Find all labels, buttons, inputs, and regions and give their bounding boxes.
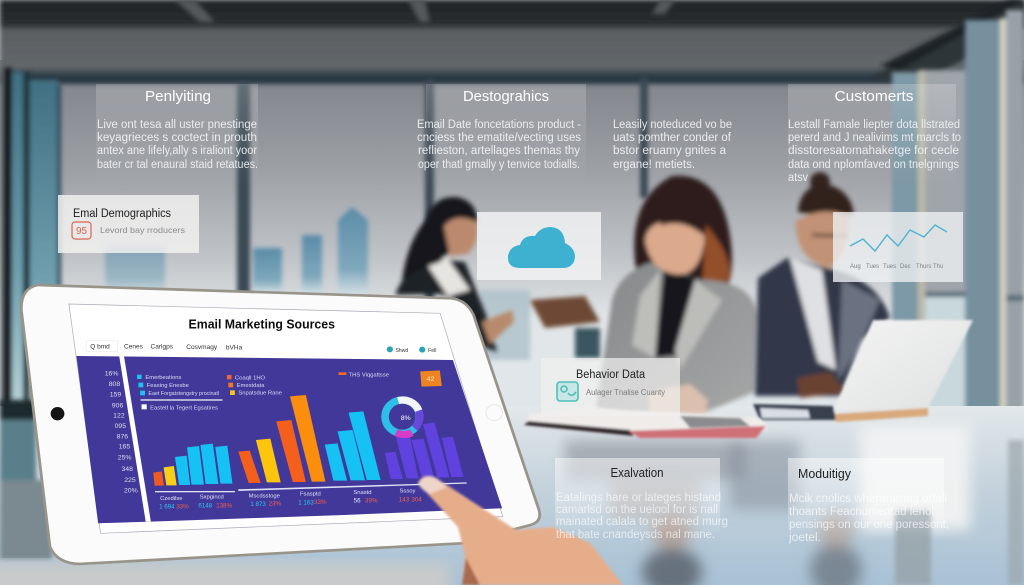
axis labels: Thurs xyxy=(916,264,931,270)
body text xyxy=(556,492,728,541)
tablet xyxy=(21,285,540,564)
chart axis and figures: 33% xyxy=(314,499,327,506)
y axis labels: 16% xyxy=(105,370,118,377)
body text: reflieston, artellages themas thy xyxy=(418,145,580,157)
body text: that bate cnandeysds nal mane. xyxy=(556,529,715,541)
body text: joetel. xyxy=(788,532,821,544)
tab bar: Cosvmagy xyxy=(186,344,218,351)
notebook xyxy=(524,408,768,438)
legend: Eastetl la Tegert Egsatires xyxy=(150,405,218,411)
y axis labels: 165 xyxy=(119,444,130,451)
chart axis and figures: 143 xyxy=(399,497,410,504)
donut chart xyxy=(385,400,420,435)
text block: centre column: Leasily noteduced vo be xyxy=(613,119,732,131)
screen title: Email Marketing Sources xyxy=(189,317,335,331)
body text xyxy=(417,119,581,171)
y axis labels: 25% xyxy=(118,455,132,462)
card: Behavior Data xyxy=(541,358,680,416)
tab bar: Q bmd xyxy=(90,344,110,351)
heading: Exalvation xyxy=(610,466,664,480)
chart axis and figures: 33% xyxy=(176,504,189,511)
tab bar: Cenes xyxy=(124,343,143,350)
panel: Exalvation xyxy=(555,458,728,541)
body text: Live ont tesa all uster pnestinge xyxy=(97,119,257,131)
y axis labels: 906 xyxy=(112,402,124,409)
y axis labels: 808 xyxy=(109,381,120,388)
card heading: Emal Demographics xyxy=(73,208,171,220)
tab bar: Shwd xyxy=(395,348,408,354)
y axis labels: 122 xyxy=(113,413,125,420)
tablet body xyxy=(21,285,540,564)
chart axis and figures: 23% xyxy=(269,500,282,507)
y axis labels: 20% xyxy=(124,488,138,495)
heading: Destograhics xyxy=(463,88,549,105)
icon: red document: 95 xyxy=(76,226,87,237)
text block: centre column: uats pomther conder of xyxy=(613,132,732,144)
body text xyxy=(788,119,961,184)
card: Email Demographics xyxy=(58,195,199,253)
body text xyxy=(788,493,949,544)
chart axis and figures: 39% xyxy=(365,497,378,504)
panel: Penlyiting xyxy=(96,84,258,184)
panel: Destograhics xyxy=(417,84,586,184)
y axis labels xyxy=(105,370,138,495)
text block: centre column: bstor eruamy gnites a xyxy=(613,145,727,157)
body text: data ond nplomfaved on tnelgnings xyxy=(788,159,959,171)
screen xyxy=(69,304,503,533)
heading: Penlyiting xyxy=(145,88,211,105)
legend: Coaqll 1HO xyxy=(235,375,266,381)
chart axis and figures xyxy=(155,482,467,511)
chart axis and figures: Mscdsstoge xyxy=(249,493,280,499)
chart axis and figures: 304 xyxy=(412,496,423,503)
body text: keyagrieces s coctect in prouth xyxy=(97,132,257,144)
icon: cloud xyxy=(508,227,575,268)
chart axis and figures: Fsasptd xyxy=(300,492,321,498)
heading: Moduitigy xyxy=(798,467,852,481)
axis labels: Tues xyxy=(883,264,896,270)
legend: Snpatsdue Rane xyxy=(238,391,282,397)
chart axis and figures: 1 694 xyxy=(159,504,175,511)
panel: Moduitigy xyxy=(788,458,949,544)
body text: pererd and J nealivims mt marcls to xyxy=(788,132,961,144)
axis labels: Thu xyxy=(933,264,943,270)
body text: mainated calala to get atned murg xyxy=(556,516,728,528)
chart axis and figures: 56 xyxy=(354,498,361,505)
card subtext: Levord bay rroducers xyxy=(100,225,185,235)
card heading: Behavior Data xyxy=(576,369,646,381)
chart axis and figures: 1 163 xyxy=(298,500,314,507)
tab bar: Carlgps xyxy=(151,344,173,351)
chart axis and figures: Sssoy xyxy=(400,489,416,495)
tablet home ring xyxy=(486,405,502,421)
heading: Customerts xyxy=(834,88,914,105)
chart axis and figures: 1 873 xyxy=(250,501,266,508)
tablet camera xyxy=(51,407,64,420)
legend: Eaet Forgatstengstry procinatl xyxy=(148,391,219,397)
panel: Customerts xyxy=(788,84,961,184)
tab bar xyxy=(86,341,436,354)
y axis labels: 159 xyxy=(110,391,121,398)
person: woman at left xyxy=(395,197,600,358)
legend: THS Viqgattsse xyxy=(349,372,389,378)
icon: teal data xyxy=(557,382,578,401)
icon: red document xyxy=(72,222,91,239)
body text: antex ane lifely,ally s iraliont yoor xyxy=(97,145,257,157)
text block: centre column: ergane! metiets. xyxy=(613,159,695,171)
card: line chart xyxy=(833,212,963,282)
chart axis and figures: Snastd xyxy=(353,490,372,496)
body text: Mcik cnolics wherararnag ortall xyxy=(789,493,947,505)
body text: Eatalings hare or lateges histand xyxy=(556,492,721,504)
chart axis and figures: 138% xyxy=(216,502,233,509)
legend xyxy=(137,372,389,411)
body text: Lestall Famale liepter dota llstrated xyxy=(788,119,960,131)
hand pointing at tablet xyxy=(418,476,623,585)
axis labels xyxy=(850,264,943,270)
axis labels: Tues xyxy=(866,264,879,270)
bar chart xyxy=(153,395,464,486)
body text: bater cr tal enaural staid retatues. xyxy=(97,159,258,171)
legend: Feasing Enesbe xyxy=(147,383,189,389)
body text: camarlsd on the uelool for is nall xyxy=(556,504,718,516)
trend line xyxy=(850,225,947,251)
card subtext: Aulager Tnalise Cuanty xyxy=(586,388,665,397)
body text: thoants Feacnumentad lenol xyxy=(789,506,934,518)
laptop xyxy=(753,320,973,422)
tab bar: bVHa xyxy=(226,344,243,351)
person: centre woman xyxy=(596,176,758,414)
body text: disstoresatomahaketge for cecle xyxy=(788,145,959,157)
y axis labels: 876 xyxy=(117,433,128,440)
tab bar: Fell xyxy=(428,348,436,354)
y axis labels: 095 xyxy=(115,423,126,430)
y axis labels: 225 xyxy=(124,477,136,484)
axis labels: Dec xyxy=(900,264,911,270)
y axis labels: 348 xyxy=(121,466,133,473)
badge: 42 xyxy=(427,376,435,383)
body text: cnciess the ematite/vecting uses xyxy=(417,132,581,144)
body text: oper thatl gmally y tenvice todialls. xyxy=(418,159,580,171)
body text: pensings on our one poressont, xyxy=(789,519,949,531)
body text xyxy=(97,119,258,171)
legend: Emestdata xyxy=(237,383,265,389)
card: cloud icon xyxy=(477,212,601,280)
chart axis and figures: 6148 xyxy=(198,503,213,510)
body text: Email Date foncetations product - xyxy=(417,119,581,131)
legend: Emerbeations xyxy=(145,375,182,381)
badge xyxy=(420,370,442,387)
body text: atsv xyxy=(788,172,808,184)
chart axis and figures: Czedilse xyxy=(160,496,183,502)
donut chart: 8% xyxy=(401,415,411,422)
chart axis and figures: Sxpgincd xyxy=(200,495,224,501)
axis labels: Aug xyxy=(850,264,861,270)
text block: centre column xyxy=(613,119,732,171)
person: man with glasses xyxy=(755,172,890,398)
